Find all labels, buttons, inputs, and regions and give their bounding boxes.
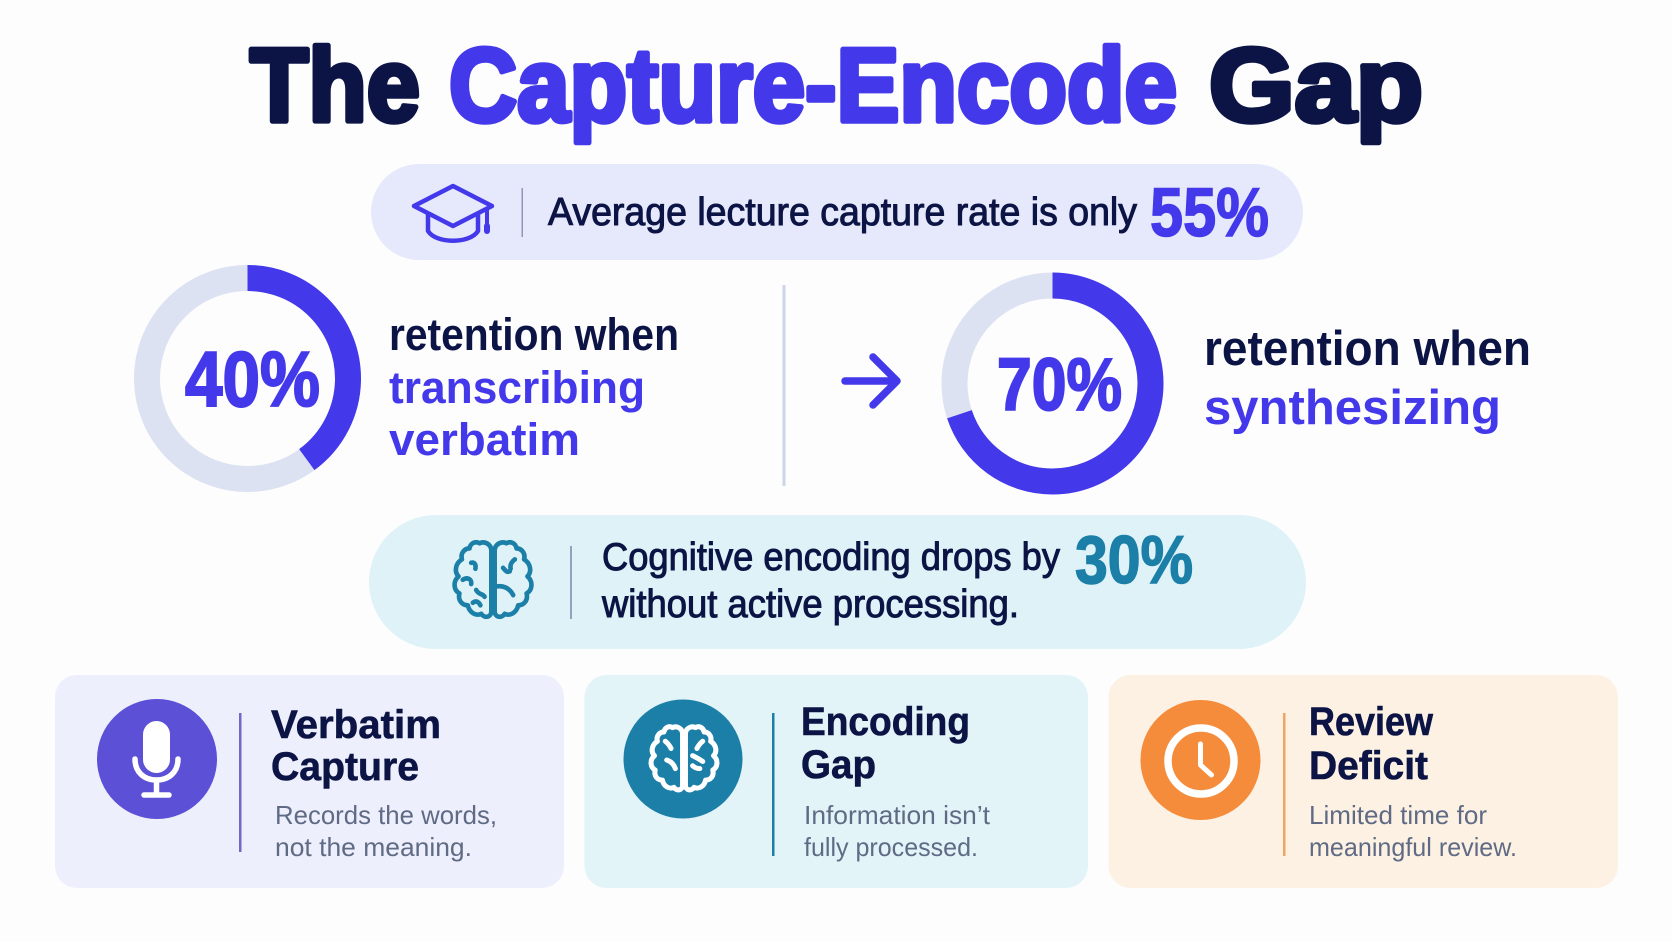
heading: encoding gap [801,700,970,787]
text: verbatim description: Records the words, [275,800,497,830]
text: capture rate statement: Average lecture capture rate is only [548,191,1137,234]
text: retention when synthesizing [1204,322,1531,435]
heading: encoding gap: Gap [801,743,876,787]
title: Gap [1209,28,1423,144]
heading: encoding gap: Encoding [801,700,970,744]
panel: verbatim capture card [55,675,564,888]
text: verbatim description: not the meaning. [275,832,472,862]
icon: brain [624,700,742,818]
icon: microphone [97,699,217,819]
heading: verbatim capture: Verbatim [271,703,441,747]
heading: review deficit [1309,700,1434,788]
donut chart: 40%: 40% [185,335,320,423]
stat: 55%: 55% [1150,174,1269,251]
heading: verbatim capture [271,703,441,789]
heading: verbatim capture: Capture [271,745,419,789]
text: retention when transcribing verbatim: retention when [389,309,679,360]
text: retention when synthesizing: synthesizing [1204,381,1501,435]
title: The [250,28,420,144]
panel: encoding gap card [584,675,1088,888]
panel: lecture capture rate pill [371,164,1303,260]
text: retention when transcribing verbatim: transcribing [389,362,645,413]
text: cognitive encoding statement: without active processing. [601,583,1019,626]
text: review description: Limited time for [1309,800,1487,830]
text: encoding description [804,800,991,862]
text: review description: meaningful review. [1309,832,1517,862]
text: encoding description: fully processed. [804,832,978,862]
heading: review deficit: Deficit [1309,744,1428,788]
donut chart: 70% [954,286,1150,482]
panel: cognitive encoding pill [369,515,1306,649]
title [250,28,1423,144]
title: Capture-Encode [449,28,1177,144]
donut chart: 40% [147,278,348,479]
text: cognitive encoding statement [601,536,1060,626]
text: verbatim description [275,800,497,862]
donut chart: 70%: 70% [997,343,1122,426]
heading: review deficit: Review [1309,700,1434,744]
text: encoding description: Information isn’t [804,800,991,830]
icon: graduation cap [414,186,492,241]
text: cognitive encoding statement: Cognitive encoding drops by [602,536,1060,579]
icon: brain outline [455,542,531,617]
text: review description [1309,800,1517,862]
panel: review deficit card [1108,675,1618,888]
text: retention when transcribing verbatim [389,309,679,465]
icon: clock [1140,700,1260,820]
text: retention when transcribing verbatim: verbatim [389,414,580,465]
text: retention when synthesizing: retention when [1204,322,1531,376]
stat: 30%: 30% [1075,522,1193,598]
arrow [845,357,897,405]
